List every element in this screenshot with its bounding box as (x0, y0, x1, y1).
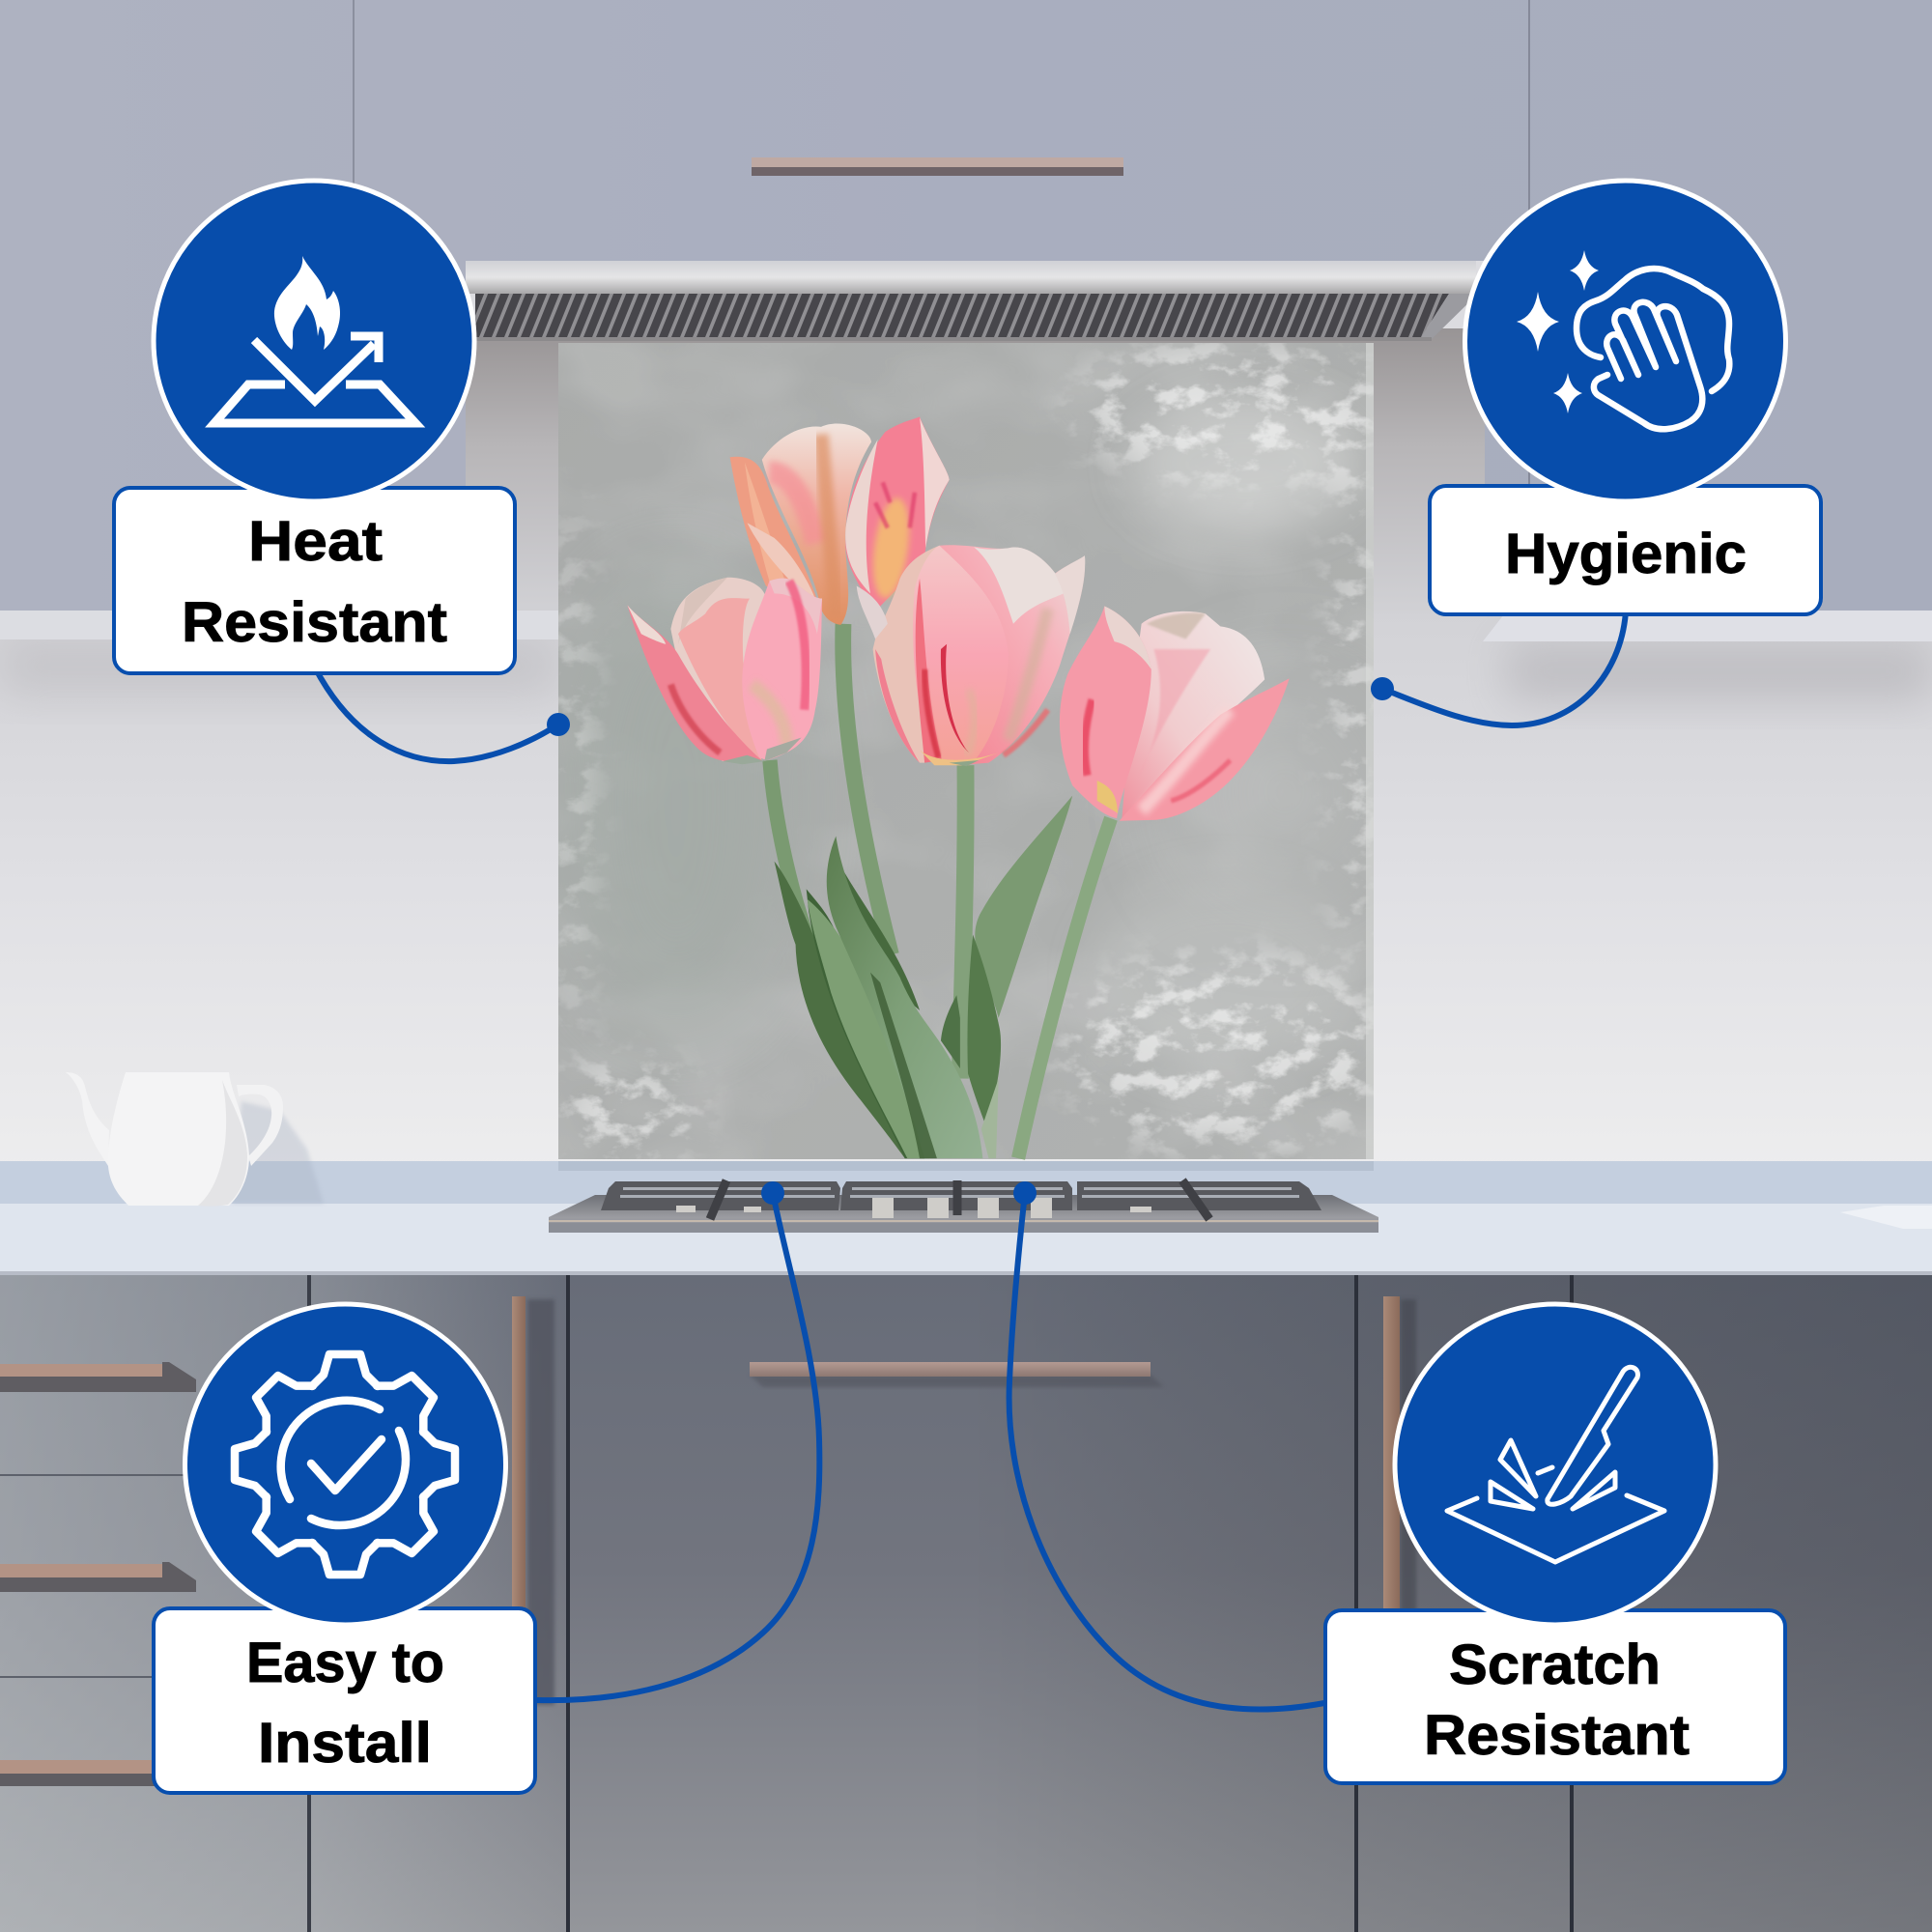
connector: easy to install (537, 1181, 819, 1700)
upper cabinets (0, 0, 1932, 611)
label box: scratch resistant (1325, 1610, 1785, 1783)
badge circle: hygienic (1464, 181, 1785, 501)
callout: easy to install: Install (258, 1712, 432, 1775)
connector: heat resistant (315, 668, 570, 761)
left leaves (775, 862, 924, 1158)
callout: hygienic (1430, 181, 1821, 614)
icon: gear with check mark (235, 1354, 455, 1575)
tulip: right (1060, 607, 1290, 821)
callout: heat resistant (114, 181, 515, 673)
tulip: back top (730, 416, 950, 625)
label text: scratch resistant: Scratch (1449, 1634, 1661, 1696)
center dark leaf (967, 934, 1001, 1126)
label text: hygienic: Hygienic (1505, 523, 1747, 585)
lower cabinet handles (0, 1296, 1416, 1786)
hob knobs (676, 1198, 1151, 1218)
label box: hygienic (1430, 486, 1821, 614)
label box: easy to install (154, 1608, 535, 1793)
connector: scratch resistant (1009, 1181, 1324, 1710)
label box: heat resistant (114, 488, 515, 673)
range hood (466, 261, 1478, 341)
stems (770, 624, 1111, 1158)
badge circle: easy to install (185, 1304, 506, 1625)
callout: heat resistant: Resistant (182, 591, 447, 654)
cooktop hob (549, 1180, 1378, 1233)
countertop (0, 1161, 1932, 1276)
tulip bouquet (627, 416, 1290, 1158)
cabinet shelf edges (0, 611, 1932, 641)
callout: scratch resistant: Resistant (1424, 1704, 1690, 1767)
lower cabinets (0, 1275, 1932, 1932)
icon: hand wiping with sparkles (1517, 250, 1729, 429)
teapot (66, 1072, 324, 1207)
grate gaps (620, 1187, 1299, 1198)
label text: easy to install: Easy to (246, 1632, 444, 1694)
callout: scratch resistant (1325, 1304, 1785, 1783)
label text: heat resistant: Heat (248, 510, 383, 573)
wall (0, 328, 1932, 1169)
connector: hygienic (1371, 611, 1626, 725)
grate dark crossbars (710, 1180, 1209, 1219)
badge circle: scratch resistant (1395, 1304, 1716, 1625)
badge circle: heat resistant (154, 181, 474, 501)
icon: knife scratching surface (1447, 1367, 1664, 1562)
tulip: centre (857, 545, 1085, 766)
icon: flame over reflected arrow (214, 256, 415, 423)
callout: easy to install (154, 1304, 535, 1793)
panel: tulip glass splashback (558, 343, 1381, 1159)
tulip: left (627, 578, 822, 764)
burner grates (601, 1181, 1321, 1210)
right leaf (975, 796, 1072, 1018)
upper cabinet handle (752, 157, 1123, 176)
